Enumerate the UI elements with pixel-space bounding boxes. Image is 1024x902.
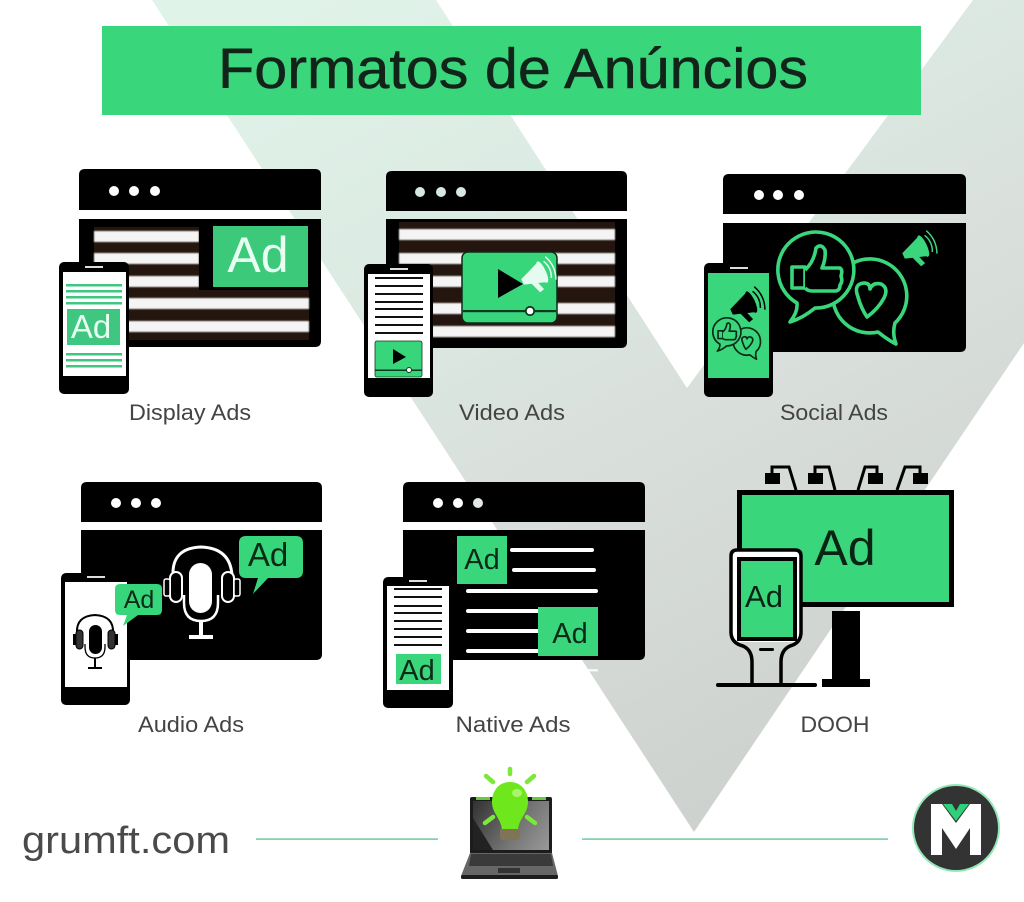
speech bubble: Ad: Ad (248, 536, 288, 573)
browser window (723, 174, 966, 352)
label: Audio Ads (138, 712, 244, 737)
kiosk: Ad (745, 579, 783, 614)
icon: microphone with headphones (164, 547, 240, 639)
ad block: Ad (464, 544, 500, 576)
label: Native Ads (456, 712, 570, 737)
footer rule right (582, 838, 888, 840)
speech bubble: small Ad (115, 584, 162, 626)
ad block (199, 222, 313, 290)
footer website: grumft.com (22, 820, 230, 862)
kiosk (718, 550, 815, 685)
browser window (403, 482, 645, 672)
label: DOOH (800, 712, 870, 737)
panel: Display Ads (59, 169, 321, 425)
phone (61, 573, 130, 705)
label: Social Ads (780, 400, 888, 425)
speech bubble: Ad (239, 536, 303, 594)
phone (364, 264, 433, 397)
icon: laptop with light bulb (461, 769, 558, 879)
footer rule left (256, 838, 438, 840)
speech bubble: small Ad: Ad (124, 586, 154, 614)
ad block: Ad (552, 618, 588, 650)
phone: Ad (399, 655, 435, 687)
panel: Native Ads (383, 482, 645, 737)
label: Video Ads (459, 400, 565, 425)
browser window (386, 171, 627, 348)
phone: Ad (71, 308, 111, 345)
background: large V logo shape (152, 0, 1024, 832)
billboard lamps (765, 467, 928, 490)
panel: DOOH (718, 467, 952, 737)
icon: small microphone with headphones (73, 615, 118, 669)
like and heart speech bubbles (778, 232, 907, 344)
title banner: Formatos de Anúncios (218, 37, 808, 101)
phone (704, 263, 773, 397)
title banner (102, 26, 921, 115)
billboard: Ad (814, 520, 876, 576)
ad block: Ad (227, 227, 289, 283)
billboard (740, 492, 952, 687)
icon: green megaphone (898, 230, 941, 271)
browser window (81, 482, 322, 660)
browser window (79, 169, 321, 347)
video player (462, 252, 560, 323)
logo (912, 784, 1000, 872)
panel: Social Ads (704, 174, 966, 425)
ad block (538, 607, 598, 656)
panel: Audio Ads (61, 482, 322, 737)
ad block (457, 536, 507, 584)
label: Display Ads (129, 400, 251, 425)
panel: Video Ads (364, 171, 627, 425)
phone (59, 262, 129, 394)
phone (383, 577, 453, 708)
